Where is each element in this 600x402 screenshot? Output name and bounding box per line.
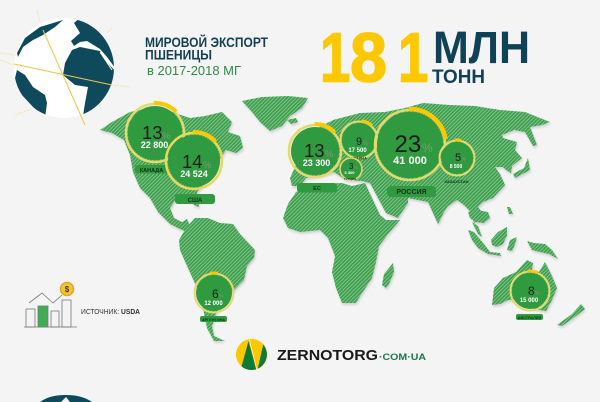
logo: Zernotorg: ·COM·UA [379, 352, 427, 362]
bubble: Turkey: 3 [349, 162, 354, 171]
bubble: Russia [373, 108, 447, 197]
unit label: million tonnes: МЛН [433, 22, 530, 73]
globe illustration [0, 10, 130, 125]
bubble: Argentina: 6 [212, 287, 219, 301]
headline number: 181 million tonnes: 1 [320, 19, 350, 97]
bubble: EU [288, 124, 342, 192]
bubble: USA: % [203, 160, 212, 171]
bubble: Australia: % [535, 291, 540, 297]
bubble: Kazakhstan [437, 138, 477, 184]
bubble: Canada: 13 [142, 122, 163, 143]
bubble: Kazakhstan: КАЗАХСТАН [444, 179, 469, 184]
bubble: EU: ЕС [313, 186, 321, 192]
bubble: Kazakhstan: % [462, 157, 466, 163]
title [145, 35, 269, 78]
bubble: Australia: 8 [528, 284, 535, 298]
bubble: Argentina: АРГЕНТИНА [202, 318, 225, 322]
globe cropped at bottom edge [40, 395, 92, 402]
bubble: EU: 23 300 [303, 158, 330, 168]
bubble: Turkey [340, 158, 362, 181]
bubble: Ukraine [336, 117, 382, 163]
bubble: Ukraine: 17 500 [348, 148, 367, 154]
bubble: Turkey: % [354, 165, 358, 170]
bubble: Australia: АВСТРАЛИЯ [518, 316, 541, 320]
bubble: Kazakhstan: 8 500 [450, 164, 462, 170]
bubble: Argentina: % [219, 294, 224, 300]
headline number: 181 million tonnes [320, 19, 428, 97]
bubble: Canada: 22 800 [141, 140, 168, 150]
bubble: USA: США [188, 198, 203, 204]
bubble: USA: 24 524 [180, 169, 208, 179]
title: МИРОВОЙ ЭКСПОРТ [145, 35, 269, 50]
bubble: Argentina: 12 000 [204, 301, 223, 307]
source note: ИСТОЧНИК: USDA [81, 309, 140, 316]
headline number: 181 million tonnes: 8 [350, 19, 387, 97]
bubble: EU: 13 [304, 140, 325, 161]
title: ПШЕНИЦЫ [145, 48, 212, 62]
bubble: Turkey: ТУРЦИЯ [344, 177, 356, 181]
bubble: Australia [508, 269, 552, 320]
logo: Zernotorg: ZERNOTORG [277, 347, 378, 364]
bubble: Kazakhstan: 5 [455, 152, 461, 164]
logo: Zernotorg [236, 338, 427, 372]
bubble: Russia: % [422, 141, 433, 155]
bubble: Russia: 41 000 [393, 155, 427, 167]
icon: chart with coin: $ [65, 285, 70, 294]
bubble: USA [164, 131, 224, 204]
bubble: Ukraine: УКРАИНА [349, 156, 367, 160]
bubble: Russia: РОССИЯ [396, 189, 427, 196]
bubble: Canada: % [162, 131, 171, 142]
bubble: Argentina [191, 270, 237, 322]
map: world continents [100, 96, 585, 341]
bubble: USA: 14 [182, 151, 203, 172]
bubble: Ukraine: % [363, 141, 369, 147]
bubble: Canada [124, 102, 186, 174]
title: в 2017-2018 МГ [147, 64, 241, 78]
bubble: Russia: 23 [394, 131, 421, 158]
bubble: Turkey: 6 300 [344, 170, 355, 175]
unit label: million tonnes: ТОНН [432, 67, 485, 88]
bubble: Ukraine: 9 [356, 136, 362, 148]
icon: chart with coin [24, 282, 77, 327]
bubble: Canada: КАНАДА [140, 168, 163, 174]
headline number: 181 million tonnes: 1 [398, 19, 428, 97]
bubble: EU: % [325, 149, 334, 160]
bubble: Australia: 15 000 [520, 298, 539, 304]
